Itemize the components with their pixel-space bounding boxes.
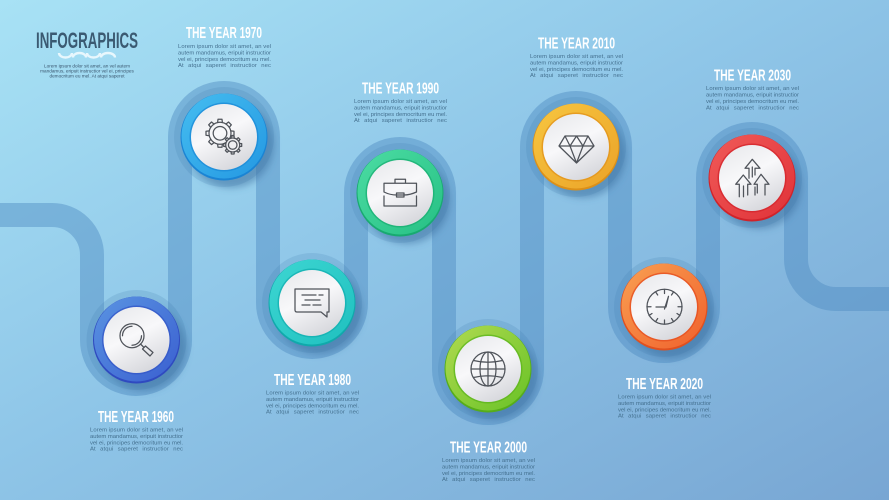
label 2000: THE YEAR 2000 <box>450 440 527 456</box>
title description <box>40 64 135 78</box>
label 2000: autem mandamus, eripuit instructior <box>442 464 535 470</box>
label 1980: At atqui saperet instructior nec <box>266 410 359 416</box>
halo <box>262 253 362 353</box>
title description: Lorem ipsum dolor sit amet, an vel autem <box>44 64 130 68</box>
icon: briefcase <box>384 179 416 206</box>
icon: chat bubble <box>295 289 329 317</box>
icon: globe <box>471 352 505 386</box>
label 1980: autem mandamus, eripuit instructior <box>266 397 359 403</box>
shadow <box>364 158 450 244</box>
ring base <box>356 150 444 236</box>
shadow <box>452 334 538 420</box>
icon: diamond <box>559 136 594 163</box>
shadow <box>188 102 274 188</box>
halo <box>438 319 538 419</box>
shadow <box>276 268 362 354</box>
ring <box>534 104 618 188</box>
label 1990: At atqui saperet instructior nec <box>354 118 447 124</box>
title wave ornament <box>59 53 115 58</box>
ring base <box>444 326 532 412</box>
shadow <box>540 112 626 198</box>
label 1960: Lorem ipsum dolor sit amet, an vel <box>90 428 183 434</box>
disc <box>631 274 697 340</box>
ring inner rim <box>102 306 171 374</box>
label 1980: THE YEAR 1980 <box>274 372 351 389</box>
label 1980: vel ei, principes democritum eu mel. <box>266 403 359 409</box>
disc <box>279 270 345 336</box>
ring inner rim <box>190 102 258 172</box>
title: INFOGRAPHICS <box>36 28 138 53</box>
label 1970: Lorem ipsum dolor sit amet, an vel <box>178 44 271 50</box>
label 2020: vel ei, principes democritum eu mel. <box>618 407 711 413</box>
disc <box>543 114 609 180</box>
label 1970: THE YEAR 1970 <box>186 25 262 42</box>
halo <box>702 128 802 228</box>
node 1990 <box>350 143 450 244</box>
ring inner rim <box>542 112 610 182</box>
label 1970: vel ei, principes democritum eu mel. <box>178 57 271 63</box>
disc <box>455 336 521 402</box>
disc <box>191 104 257 170</box>
label 2010 <box>530 36 623 79</box>
node 2000 <box>438 319 538 420</box>
label 2000: vel ei, principes democritum eu mel. <box>442 471 535 477</box>
node 2010 <box>526 97 626 198</box>
halo <box>350 143 450 243</box>
title description: democritum eu mel. At atqui saperet <box>49 74 125 78</box>
halo <box>86 290 186 390</box>
node 2030 <box>702 128 802 229</box>
label 2020 <box>618 376 711 420</box>
label 2030: vel ei, principes democritum eu mel. <box>706 99 799 105</box>
label 2020: At atqui saperet instructior nec <box>618 414 711 420</box>
label 2000 <box>442 440 535 483</box>
label 2010: At atqui saperet instructior nec <box>530 73 623 79</box>
ring <box>270 260 354 344</box>
label 1960: THE YEAR 1960 <box>98 409 174 426</box>
ring <box>710 134 794 220</box>
label 1960 <box>90 409 183 453</box>
label 1970 <box>178 25 271 69</box>
label 1990: THE YEAR 1990 <box>362 80 439 98</box>
disc <box>719 145 785 211</box>
ring base <box>268 260 356 346</box>
label 2030: autem mandamus, eripuit instructior <box>706 93 799 99</box>
label 1960: autem mandamus, eripuit instructior <box>90 434 183 440</box>
label 1990 <box>354 80 447 124</box>
ring base <box>180 94 268 180</box>
halo <box>614 257 714 357</box>
ring base <box>93 296 180 384</box>
ring inner rim <box>630 272 698 342</box>
ring <box>182 94 266 178</box>
label 2010: vel ei, principes democritum eu mel. <box>530 67 623 73</box>
halo <box>526 97 626 197</box>
title block <box>36 28 138 78</box>
label 2010: autem mandamus, eripuit instructior <box>530 60 623 66</box>
disc <box>367 160 433 226</box>
icon: clock <box>647 289 682 324</box>
label 2030: Lorem ipsum dolor sit amet, an vel <box>706 86 799 92</box>
label 2010: Lorem ipsum dolor sit amet, an vel <box>530 54 623 60</box>
timeline road <box>0 93 889 413</box>
ring base <box>620 264 708 350</box>
label 2010: THE YEAR 2010 <box>538 36 615 52</box>
shadow <box>100 305 186 391</box>
shadow <box>716 143 802 229</box>
label 2000: At atqui saperet instructior nec <box>442 477 535 483</box>
label 2030: THE YEAR 2030 <box>714 68 791 85</box>
node 1970 <box>174 87 274 188</box>
label 1970: autem mandamus, eripuit instructior <box>178 50 271 56</box>
ring <box>94 296 179 382</box>
label 1990: vel ei, principes democritum eu mel. <box>354 112 447 118</box>
node 2020 <box>614 257 714 358</box>
label 1960: vel ei, principes democritum eu mel. <box>90 440 183 446</box>
title description: mandamus, eripuit instructior vel ei, principes <box>40 68 135 74</box>
label 2000: Lorem ipsum dolor sit amet, an vel <box>442 458 535 464</box>
ring inner rim <box>454 334 522 404</box>
shadow <box>628 272 714 358</box>
icon: growth arrows <box>736 159 769 197</box>
label 1990: Lorem ipsum dolor sit amet, an vel <box>354 99 447 105</box>
label 2020: THE YEAR 2020 <box>626 376 703 393</box>
disc <box>104 307 170 373</box>
label 2030: At atqui saperet instructior nec <box>706 105 799 111</box>
ring base <box>708 134 796 222</box>
icon: gears <box>206 119 242 154</box>
icon: magnifier <box>120 324 153 356</box>
node 1980 <box>262 253 362 354</box>
label 2020: autem mandamus, eripuit instructior <box>618 401 711 407</box>
node 1960 <box>86 290 186 391</box>
label 1990: autem mandamus, eripuit instructior <box>354 105 447 111</box>
label 1970: At atqui saperet instructior nec <box>178 63 271 69</box>
label 1980 <box>266 372 359 416</box>
ring inner rim <box>718 144 786 212</box>
ring inner rim <box>278 268 346 338</box>
label 1960: At atqui saperet instructior nec <box>90 447 183 453</box>
ring <box>446 326 530 410</box>
ring <box>358 150 442 234</box>
label 2030 <box>706 68 799 111</box>
ring base <box>532 104 620 190</box>
label 2020: Lorem ipsum dolor sit amet, an vel <box>618 394 711 400</box>
ring inner rim <box>366 158 434 228</box>
label 1980: Lorem ipsum dolor sit amet, an vel <box>266 390 359 396</box>
ring <box>622 264 706 348</box>
halo <box>174 87 274 187</box>
